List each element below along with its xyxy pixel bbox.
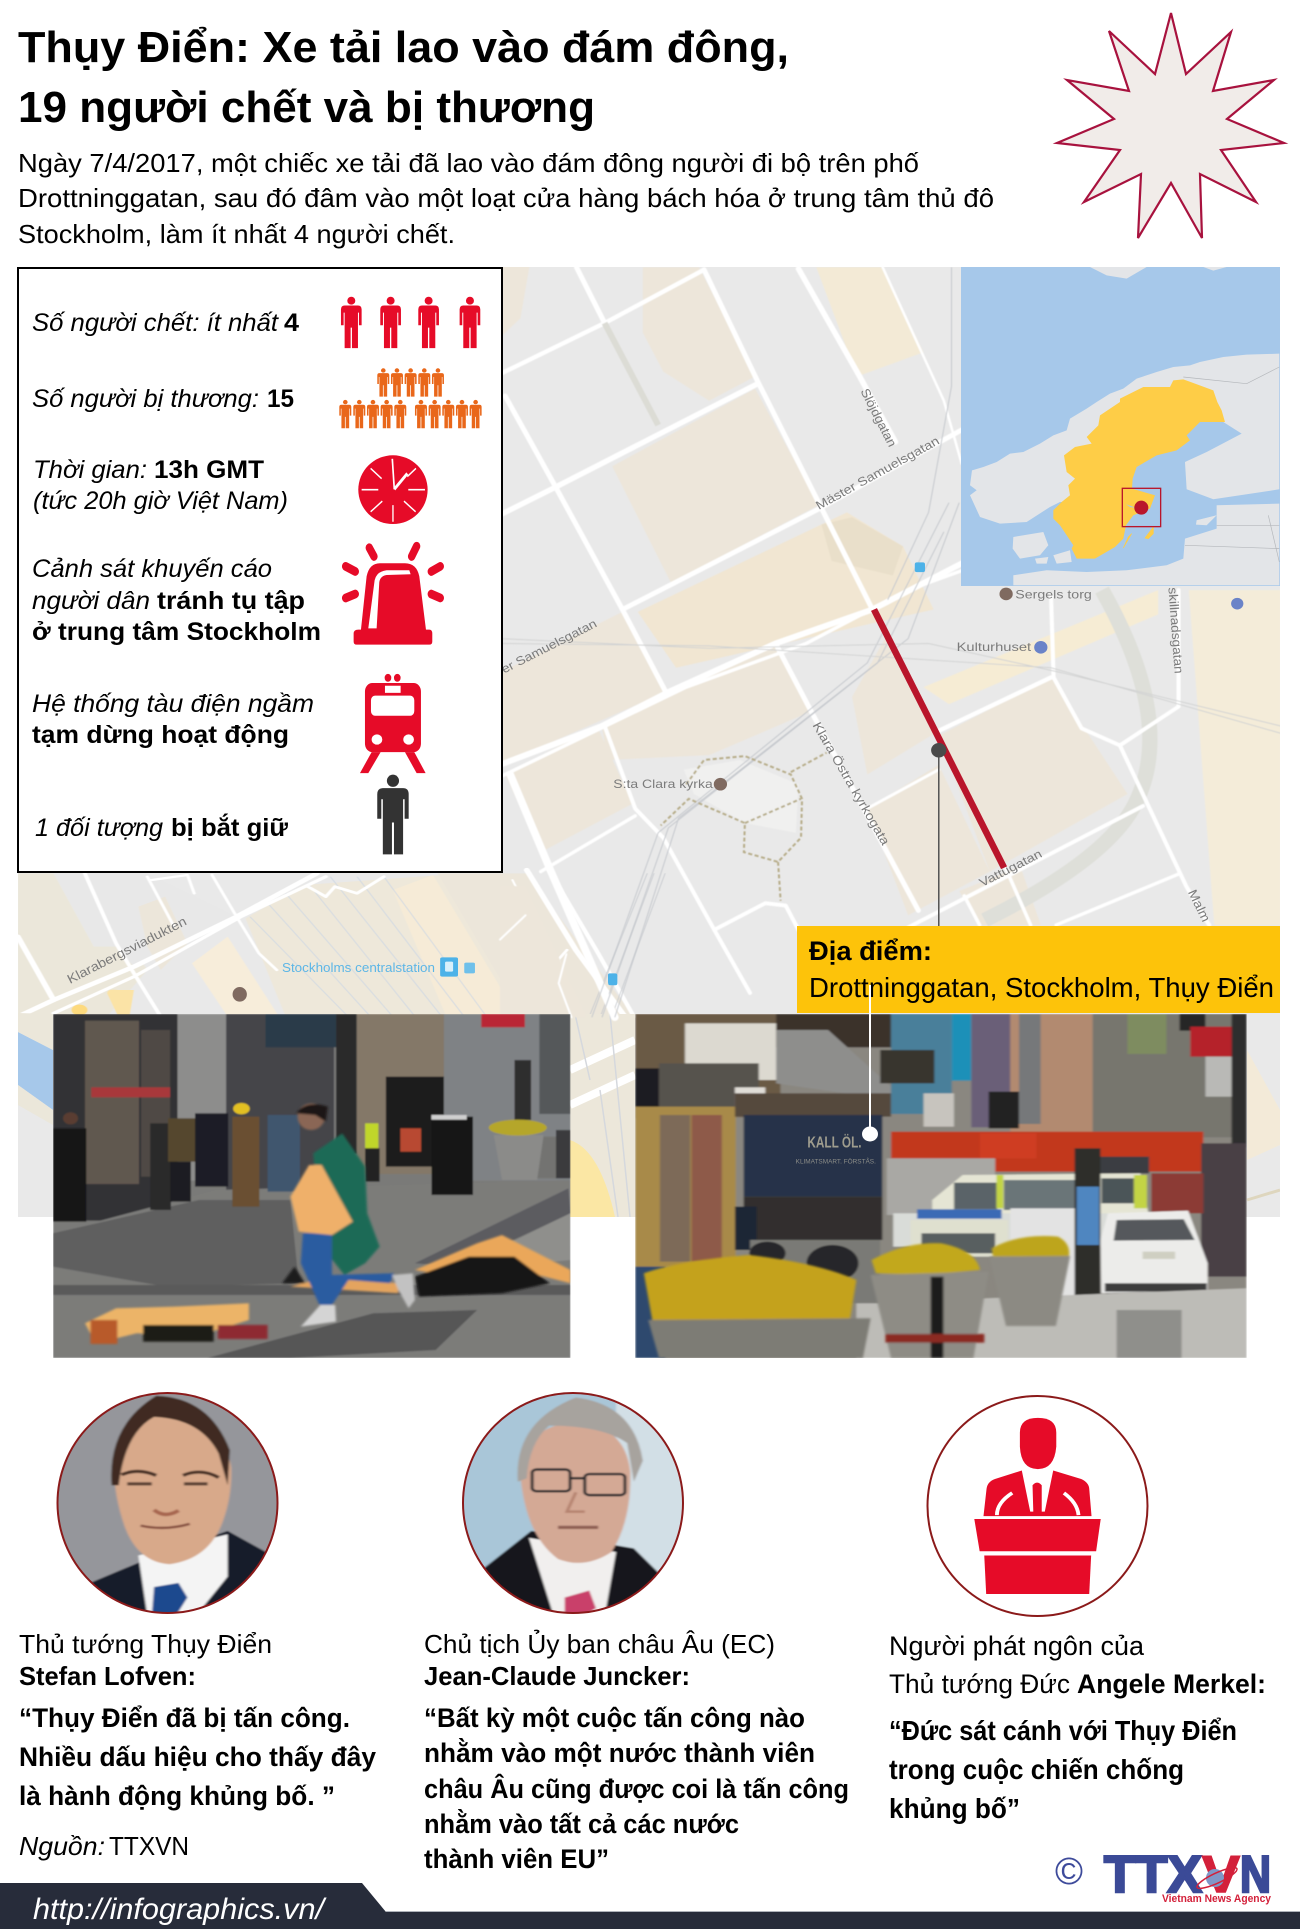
map: street names: skillnadsgatan [1165, 587, 1186, 674]
location callout: Địa điểm: [809, 936, 932, 966]
location callout: Drottninggatan, Stockholm, Thụy Điển [809, 972, 1274, 1003]
quote: Angela Merkel's spokesperson: Angele Merkel: [1077, 1669, 1266, 1699]
title: 19 người chết và bị thương [18, 83, 595, 132]
land: Sweden [1053, 379, 1225, 559]
icon: speaker at lectern [928, 1396, 1148, 1616]
quote: Jean-Claude Juncker: châu Âu cũng được coi là tấn công [424, 1773, 849, 1804]
map: place markers [608, 562, 1243, 985]
map: street names: Klara Östra kyrkogata [810, 720, 893, 848]
title: Thụy Điển: Xe tải lao vào đám đông, [18, 23, 789, 72]
fact: metro [32, 690, 314, 749]
footer band with URL: http://infographics.vn/ [33, 1893, 327, 1926]
portrait: Stefan Lofven [54, 1391, 281, 1619]
quote: Jean-Claude Juncker: thành viên EU” [424, 1844, 609, 1874]
text label: Klarabergsviadukten: Klarabergsviadukten [65, 913, 189, 987]
quote: Stefan Lofven: là hành động khủng bố. ” [19, 1781, 335, 1811]
source note: Nguồn: [19, 1831, 105, 1861]
icon: siren [346, 546, 440, 645]
leader line and dot [931, 743, 946, 927]
fact: police warning [32, 555, 321, 646]
map: street names: Vattugatan [977, 847, 1044, 890]
map: lower-left station area [18, 870, 665, 1017]
fact: time: Thời gian: [33, 456, 147, 484]
intro paragraph: Ngày 7/4/2017, một chiếc xe tải đã lao vào đám đông người đi bộ trên phố [18, 148, 919, 178]
fact: time [33, 456, 288, 515]
land: Norway [970, 362, 1200, 524]
quote: Angela Merkel's spokesperson: trong cuộc chiến chống [889, 1754, 1184, 1785]
intro paragraph [18, 148, 994, 249]
fact: police warning: ở trung tâm Stockholm [32, 618, 321, 646]
map of central Stockholm [18, 260, 1281, 1217]
locator box and dot [1122, 488, 1161, 527]
quote: Stefan Lofven [19, 1629, 376, 1811]
quote: Angela Merkel's spokesperson [889, 1631, 1266, 1824]
map: main street grid [499, 260, 1281, 1017]
logo: TTXVN Vietnam News Agency: Vietnam News Agency [1162, 1893, 1272, 1905]
quote: Angela Merkel's spokesperson: Thủ tướng Đức [889, 1669, 1070, 1699]
fact: deaths: 4 [284, 309, 299, 337]
footer band with URL [0, 1883, 1300, 1929]
location callout [797, 926, 1280, 1013]
pointer from callout to truck [862, 985, 878, 1142]
quote: Angela Merkel's spokesperson: Người phát ngôn của [889, 1631, 1145, 1661]
fact: arrest [35, 812, 289, 842]
quote: Stefan Lofven: “Thụy Điển đã bị tấn công. [19, 1703, 350, 1733]
truck lettering: KLIMATSMART. FÖRSTÅS. [796, 1157, 876, 1165]
map: street names: Kulturhuset [957, 641, 1032, 654]
logo: TTXVN Vietnam News Agency: © [1055, 1851, 1083, 1893]
source note: TTXVN [109, 1831, 189, 1861]
panel: facts box [18, 268, 502, 872]
fact: metro: tạm dừng hoạt động [32, 721, 289, 749]
truck lettering [796, 1134, 876, 1165]
icon: clock [358, 455, 428, 524]
icon: explosion star [1057, 13, 1284, 238]
fact: police warning: Cảnh sát khuyến cáo [32, 555, 272, 583]
truck lettering: KALL ÖL. [807, 1134, 862, 1151]
fact: police warning: tránh tụ tập [157, 587, 305, 615]
icon: 4 dead [341, 297, 480, 348]
map: street names: Sergels torg [1015, 588, 1092, 601]
quote: Stefan Lofven: Nhiều dấu hiệu cho thấy đây [19, 1742, 376, 1772]
text label: Stockholms centralstation: Stockholms centralstation [282, 960, 435, 975]
icon: 15 injured [339, 368, 482, 428]
map: street names: Mäster Samuelsgatan [813, 434, 942, 513]
land: Finland and the north-east [1173, 354, 1279, 499]
quote: Jean-Claude Juncker [424, 1628, 849, 1874]
fact: injured: Số người bị thương: [32, 385, 259, 413]
fact: metro: Hệ thống tàu điện ngầm [32, 690, 314, 718]
map: street names: er Samuelsgatan [499, 617, 599, 676]
quote: Jean-Claude Juncker: Jean-Claude Juncker: [424, 1661, 690, 1691]
inset map: Scandinavia [961, 267, 1280, 586]
photo: victims on street [53, 1014, 570, 1358]
quote: Jean-Claude Juncker: nhằm vào tất cả các nước [424, 1808, 739, 1839]
quote: Jean-Claude Juncker: Chủ tịch Ủy ban châu Âu (EC) [424, 1628, 775, 1659]
logo: TTXVN Vietnam News Agency [1055, 1846, 1272, 1905]
map: street names: Slöjdgatan [857, 386, 899, 449]
quote: Stefan Lofven: Thủ tướng Thụy Điển [19, 1629, 272, 1659]
quote: Jean-Claude Juncker: “Bất kỳ một cuộc tấn công nào [424, 1703, 805, 1733]
fact: arrest: 1 đối tượng [35, 814, 163, 842]
fact: injured: 15 [267, 385, 294, 413]
map: station markers [233, 957, 617, 1002]
intro paragraph: Stockholm, làm ít nhất 4 người chết. [18, 219, 455, 249]
map: lower edge strips beside photos [18, 1013, 1280, 1217]
logo: TTXVN Vietnam News Agency: V [1202, 1846, 1240, 1904]
map: street names [499, 386, 1213, 924]
fact: police warning: người dân [32, 587, 150, 615]
fact: time: 13h GMT [154, 456, 264, 484]
route: Drottninggatan highlighted [874, 609, 1004, 868]
quote: Angela Merkel's spokesperson: “Đức sát cánh với Thụy Điển [889, 1715, 1237, 1746]
intro paragraph: Drottninggatan, sau đó đâm vào một loạt cửa hàng bách hóa ở trung tâm thủ đô [18, 183, 994, 213]
icon: metro train [360, 674, 426, 773]
photo: truck crash scene [635, 1014, 1247, 1358]
map: street names: S:ta Clara kyrka [613, 777, 713, 791]
portrait: Jean-Claude Juncker [460, 1391, 687, 1619]
quote: Stefan Lofven: Stefan Lofven: [19, 1661, 196, 1691]
fact: time: (tức 20h giờ Việt Nam) [33, 487, 288, 515]
logo: TTXVN Vietnam News Agency: TTX [1104, 1846, 1202, 1904]
quote: Angela Merkel's spokesperson: khủng bố” [889, 1793, 1020, 1824]
title [18, 23, 789, 132]
fact: arrest: bị bắt giữ [171, 812, 289, 842]
logo: TTXVN Vietnam News Agency: N [1240, 1846, 1271, 1904]
icon: arrested person [377, 775, 409, 854]
map: street names: Malm [1185, 887, 1213, 924]
quote: Jean-Claude Juncker: nhằm vào một nước thành viên [424, 1737, 815, 1768]
fact: deaths: Số người chết: ít nhất [32, 309, 279, 337]
source note [19, 1831, 189, 1861]
